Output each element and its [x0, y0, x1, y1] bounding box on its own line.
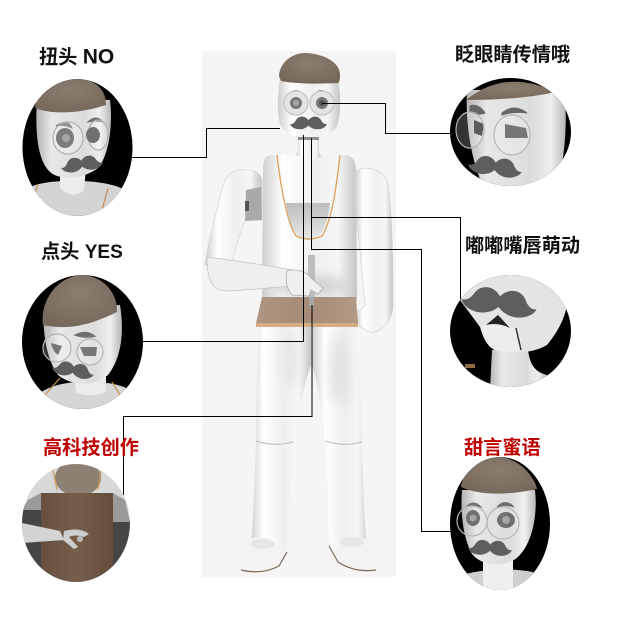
robot forearm — [207, 257, 292, 291]
chest dome — [286, 203, 330, 240]
robot head — [278, 78, 340, 138]
robot torso — [262, 155, 357, 300]
shoulder straps — [277, 155, 340, 239]
robot left leg — [239, 325, 311, 572]
robot hat — [279, 53, 340, 84]
robot neck — [296, 136, 321, 159]
robot left upper arm — [205, 170, 262, 265]
label: high tech creation: 高科技创作 — [43, 436, 139, 459]
label: nod: 点头 YES — [41, 241, 123, 263]
label: sweet talk: 甜言蜜语 — [464, 436, 541, 459]
vignette: pout — [448, 272, 573, 390]
label: wink: 眨眼睛传情哦 — [455, 44, 570, 66]
vignette: sweet talk — [448, 455, 552, 592]
robot right arm — [355, 168, 393, 333]
robot nose — [303, 112, 313, 120]
wooden board — [256, 297, 358, 327]
carving tool — [308, 255, 315, 305]
robot hand — [286, 270, 323, 296]
robot right leg — [312, 325, 377, 571]
panel: robot backdrop — [202, 51, 396, 577]
leader lines — [124, 104, 460, 532]
robot moustache — [290, 117, 327, 129]
robot figure — [205, 53, 393, 572]
label: turn head: 扭头 NO — [39, 46, 114, 68]
label: pout: 嘟嘟嘴唇萌动 — [465, 235, 580, 257]
vignette: nod — [20, 272, 146, 412]
robot eyes and glasses — [284, 90, 334, 115]
robot mouth band — [298, 137, 319, 140]
vignette: head turn — [22, 79, 132, 216]
vignette: board carving — [20, 460, 132, 584]
arm bracket — [245, 187, 262, 221]
vignette: wink — [448, 76, 573, 190]
